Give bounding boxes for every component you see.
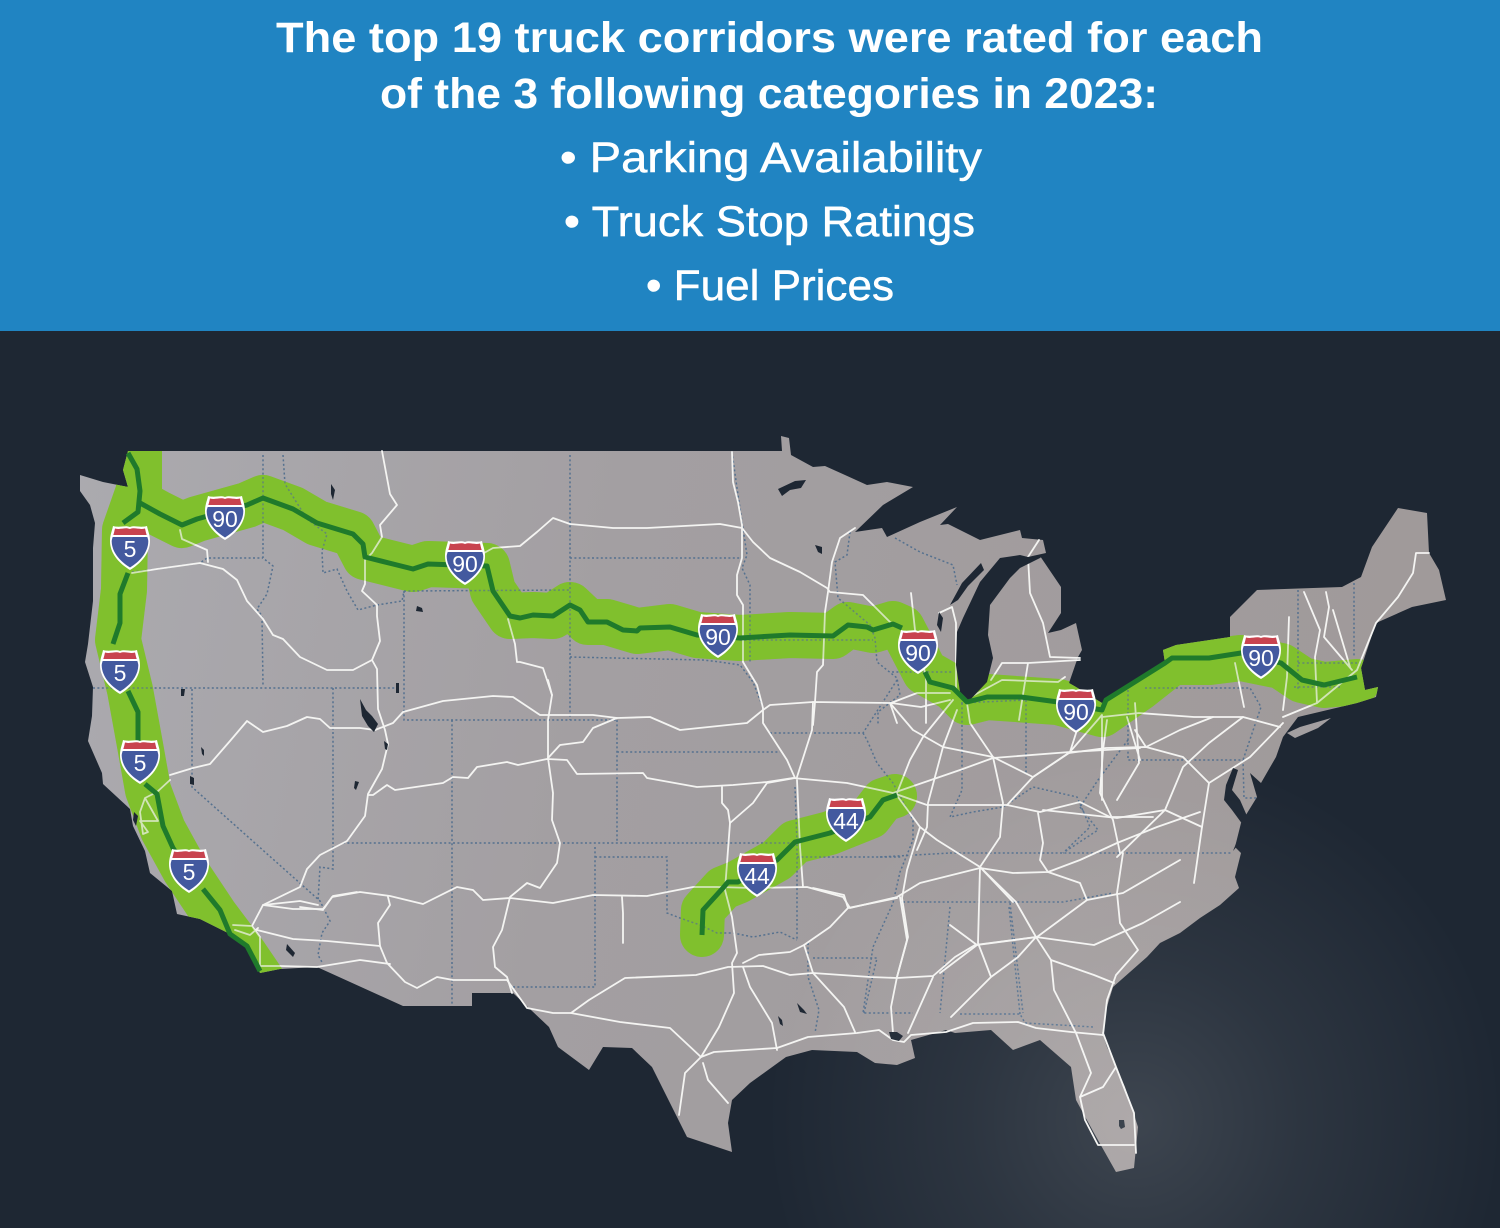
icon: I-90 shield, Ohio xyxy=(1056,689,1096,733)
icon: I-90 shield, South Dakota: 90 xyxy=(705,624,731,650)
icon: I-5 shield, Oregon xyxy=(100,650,140,694)
highway network xyxy=(132,451,1429,1153)
icon: I-90 shield, Montana xyxy=(445,541,485,585)
map of the contiguous United States xyxy=(80,436,1500,1228)
icon: I-44 shield, Oklahoma xyxy=(737,853,777,897)
icon: I-44 shield, Missouri xyxy=(826,798,866,842)
lakes and bays xyxy=(133,480,1247,1129)
icon: I-90 shield, Idaho xyxy=(205,496,245,540)
land mass xyxy=(80,436,1446,1172)
dark map background xyxy=(0,331,1500,1228)
icon: I-5 shield, northern California xyxy=(120,740,160,784)
icon: I-5 shield, southern California: 5 xyxy=(183,859,195,885)
icon: I-90 shield, Idaho: 90 xyxy=(212,506,238,532)
category list: • Truck Stop Ratings xyxy=(564,198,975,246)
state borders xyxy=(93,452,1361,1033)
I-5 route line xyxy=(113,453,260,971)
icon: I-5 shield, Oregon: 5 xyxy=(114,660,126,686)
icon: I-5 shield, Washington xyxy=(110,526,150,570)
icon: I-90 shield, South Dakota xyxy=(698,614,738,658)
category list xyxy=(560,134,983,310)
icon: I-44 shield, Missouri: 44 xyxy=(833,808,859,834)
icon: I-90 shield, Wisconsin: 90 xyxy=(905,640,931,666)
icon: I-90 shield, Ohio: 90 xyxy=(1063,699,1089,725)
icon: I-90 shield, New York: 90 xyxy=(1248,645,1274,671)
icon: I-90 shield, New York xyxy=(1241,635,1281,679)
icon: I-5 shield, Washington: 5 xyxy=(124,536,136,562)
header panel xyxy=(0,0,1500,331)
heading: of the 3 following categories in 2023: xyxy=(380,70,1158,118)
corridor highlight bands xyxy=(118,440,1357,980)
I-90 route line xyxy=(140,498,1357,710)
icon: I-44 shield, Oklahoma: 44 xyxy=(744,863,770,889)
category list: • Parking Availability xyxy=(560,134,983,182)
heading: The top 19 truck corridors were rated for each xyxy=(276,14,1263,62)
category list: • Fuel Prices xyxy=(646,262,894,310)
icon: I-90 shield, Montana: 90 xyxy=(452,551,478,577)
band tint over highways xyxy=(118,440,1357,980)
heading xyxy=(276,14,1263,118)
soft glow over south-east xyxy=(700,740,1500,1228)
icon: I-5 shield, northern California: 5 xyxy=(134,750,146,776)
I-44 route line xyxy=(702,795,897,935)
icon: I-5 shield, southern California xyxy=(169,849,209,893)
icon: I-90 shield, Wisconsin xyxy=(898,630,938,674)
